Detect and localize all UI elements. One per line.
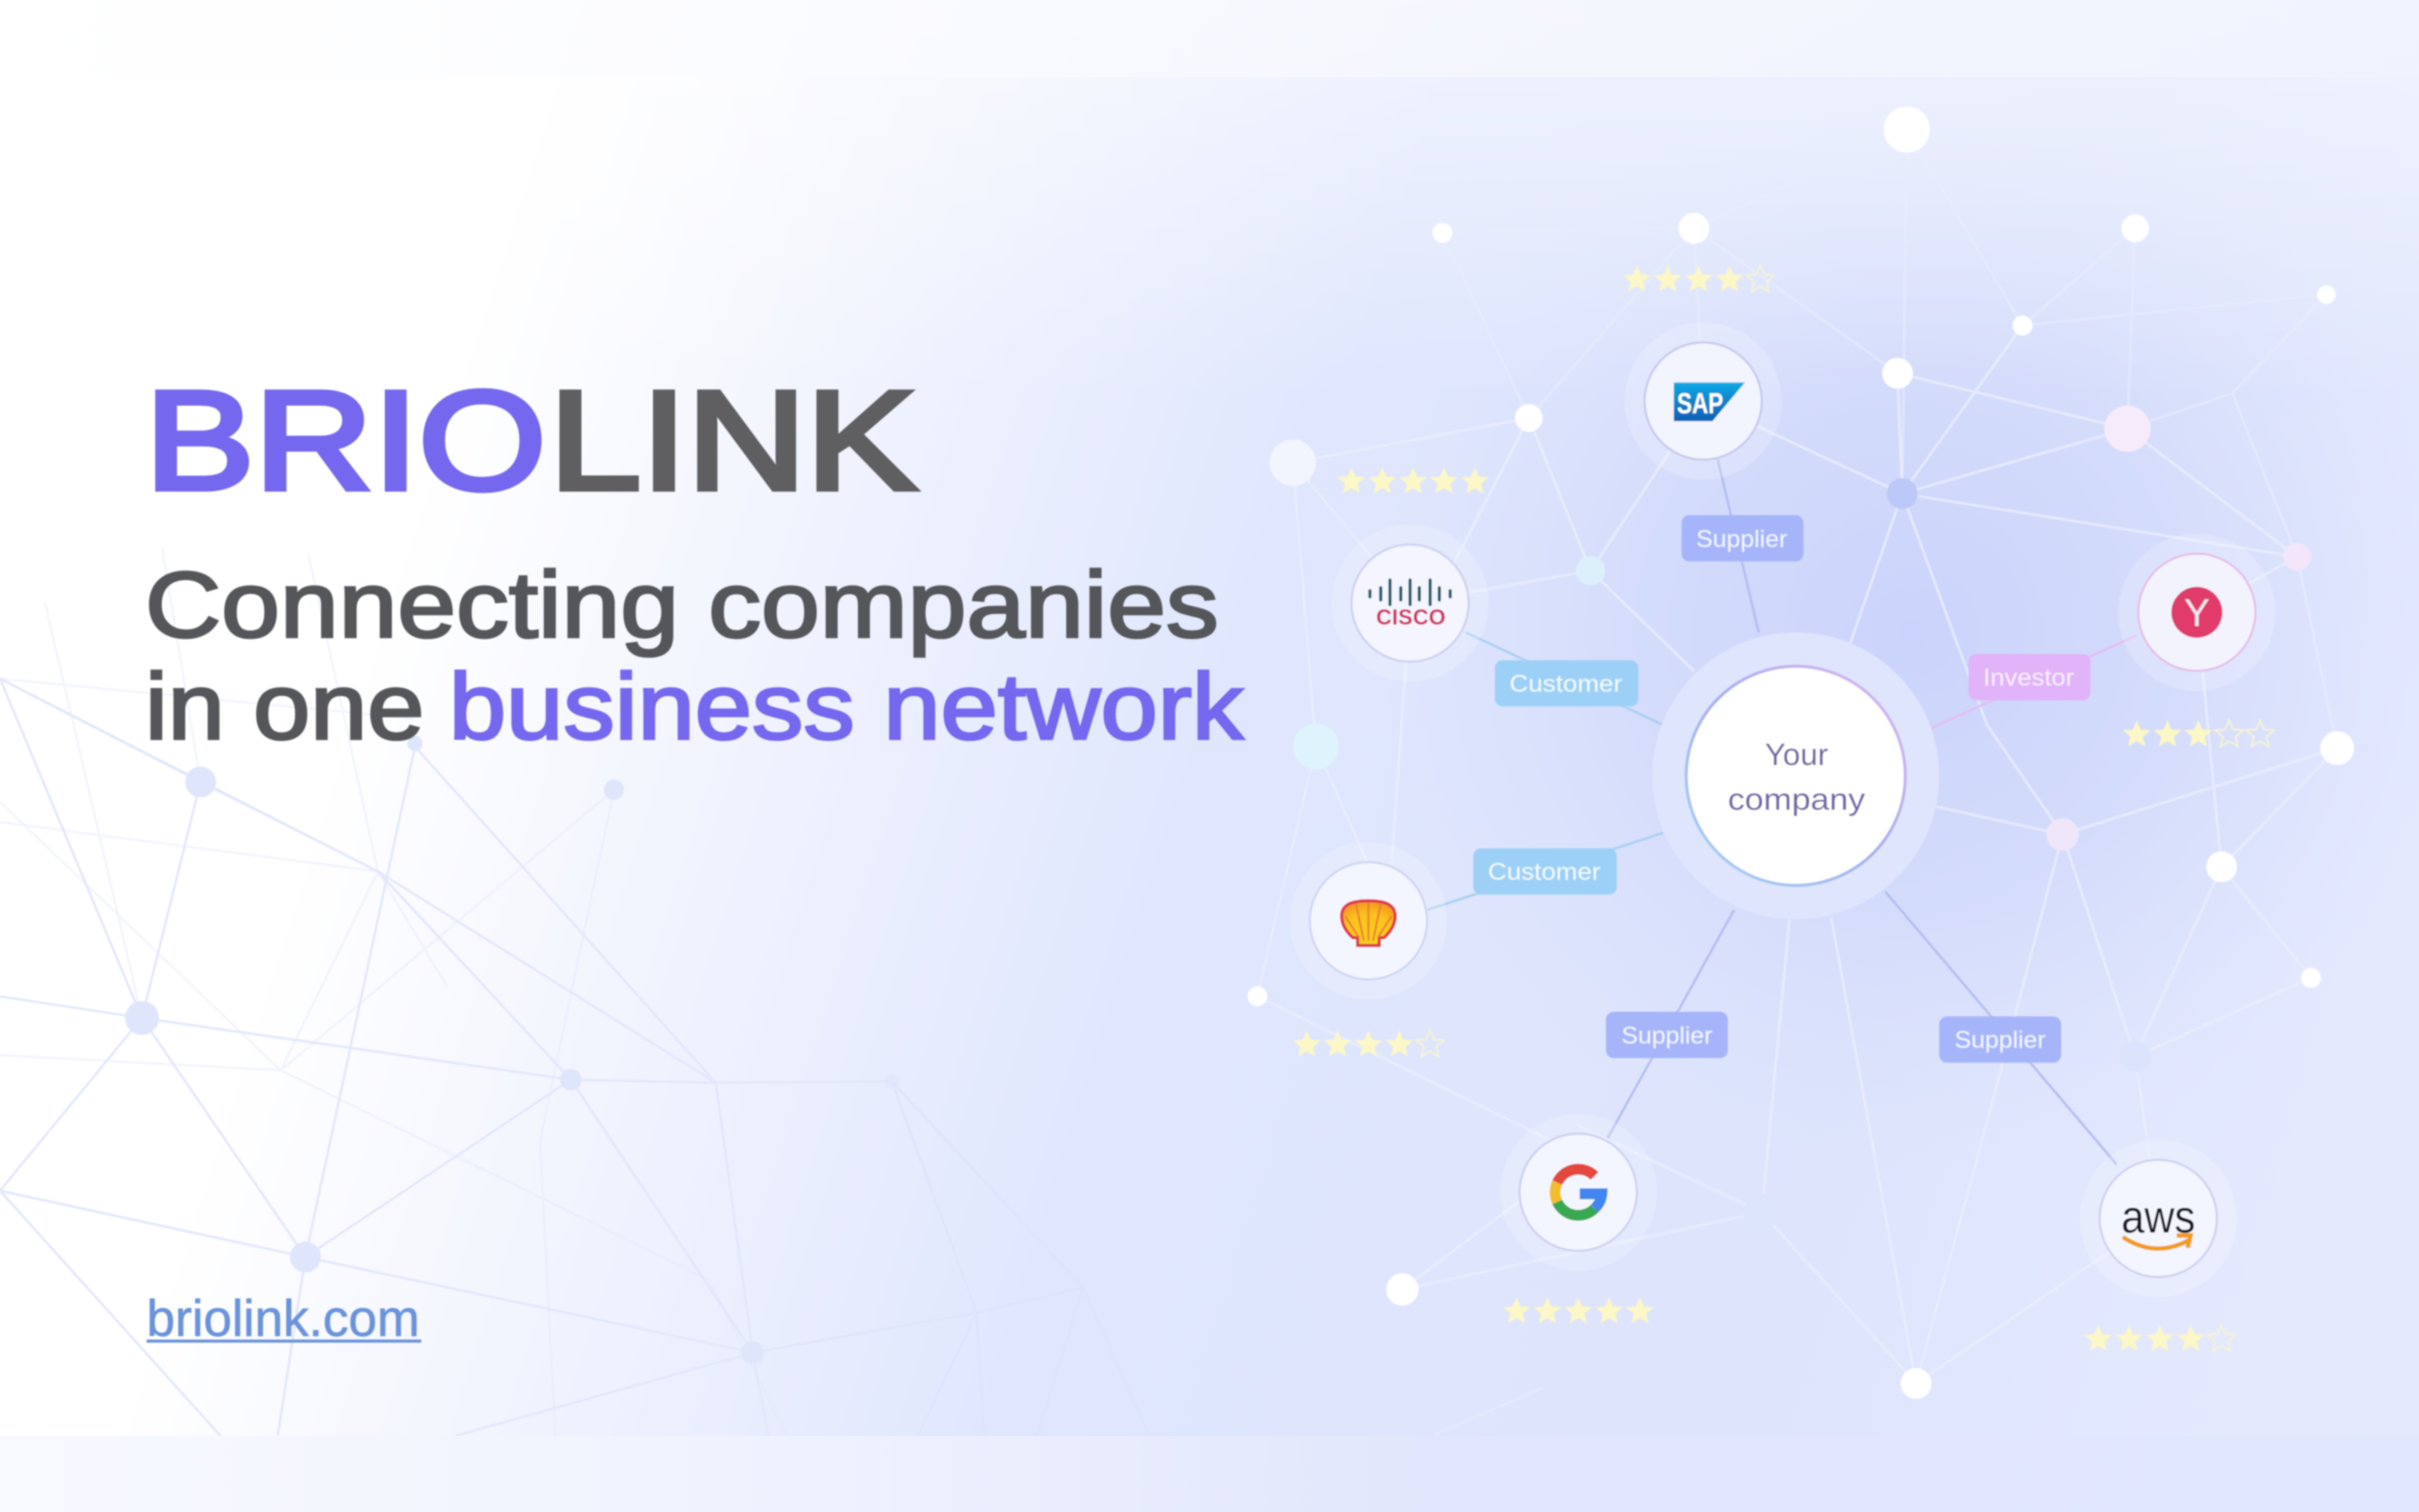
website link: briolink.com xyxy=(147,1291,420,1347)
label: supplier Google xyxy=(1606,1012,1728,1058)
label: customer Cisco xyxy=(1495,660,1638,706)
label: supplier SAP xyxy=(1682,515,1804,562)
stars: Cisco 5 of 5 xyxy=(1337,468,1489,493)
company node: Shell xyxy=(1289,842,1447,1000)
stars: Shell 4 of 5 xyxy=(1292,1030,1444,1057)
company node: AWS: aws xyxy=(2121,1191,2195,1243)
company node: Y: Y xyxy=(2184,591,2209,635)
stars: AWS 4 of 5 xyxy=(2084,1324,2235,1351)
tagline: business network xyxy=(449,654,1244,759)
label: investor xyxy=(1969,654,2090,700)
label: supplier AWS xyxy=(1939,1017,2061,1063)
star ratings xyxy=(1292,266,2274,1351)
label: supplier AWS: Supplier xyxy=(1954,1027,2046,1054)
stars: Y 3 of 5 xyxy=(2123,720,2274,746)
label: supplier Google: Supplier xyxy=(1622,1023,1712,1049)
relationship labels xyxy=(1473,515,2090,1063)
label: customer Shell: Customer xyxy=(1488,859,1601,885)
tagline: Connecting companies xyxy=(145,552,1219,657)
company node: Y xyxy=(2118,533,2275,691)
bottom strip xyxy=(0,1436,2419,1512)
central node: your company: company xyxy=(1728,782,1866,816)
brand title: BRIO xyxy=(145,364,546,520)
left decorative network xyxy=(0,547,1150,1436)
company node: AWS xyxy=(2080,1140,2237,1297)
label: supplier SAP: Supplier xyxy=(1696,526,1788,552)
relationship connectors xyxy=(1427,456,2137,1164)
right network background xyxy=(1248,107,2354,1435)
label: customer Cisco: Customer xyxy=(1509,671,1622,698)
tagline: in one xyxy=(145,654,424,759)
brand title xyxy=(145,364,916,520)
central node: your company: Your xyxy=(1765,737,1829,771)
tagline xyxy=(145,552,1244,759)
top strip xyxy=(0,0,2419,77)
brand title: LINK xyxy=(550,364,916,520)
company node: SAP xyxy=(1625,323,1782,480)
company node: Cisco xyxy=(1331,525,1489,682)
stars: Google 5 of 5 xyxy=(1503,1297,1654,1323)
company node: Cisco: CISCO xyxy=(1376,605,1446,629)
stars: SAP 4 of 5 xyxy=(1623,266,1774,291)
company node: SAP: SAP xyxy=(1677,387,1723,420)
central node: your company xyxy=(1652,632,1939,919)
company node: Google xyxy=(1500,1114,1657,1271)
label: investor: Investor xyxy=(1983,665,2074,691)
label: customer Shell xyxy=(1473,848,1617,895)
